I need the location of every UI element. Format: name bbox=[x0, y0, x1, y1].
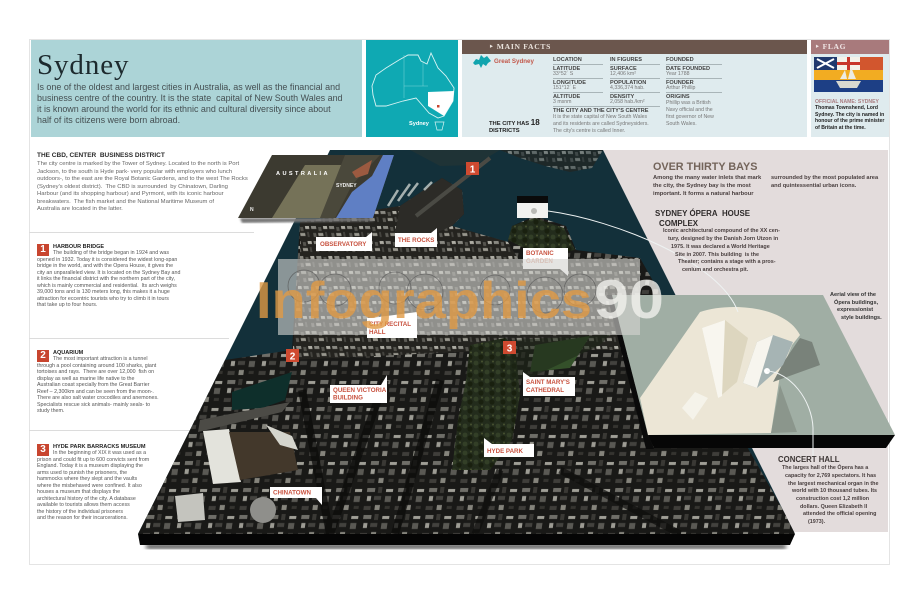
flag caption: Sydney. The city is named in bbox=[815, 112, 884, 118]
body text: opened in 1932. Today it is considered the widest long-span bbox=[37, 256, 177, 262]
body text: hammocks where they slept and the vaults bbox=[37, 476, 137, 482]
body text: the history of the individual prisoners bbox=[37, 508, 123, 514]
text: city and centre: and its residents are called Sydneysiders. bbox=[553, 121, 649, 127]
text: CBD paragraph bbox=[37, 161, 248, 212]
icon: Great Sydney map bbox=[473, 55, 491, 68]
text: opera complex paragraph: tury, designed by the Danish Jorn Utzon in bbox=[668, 236, 778, 242]
body text: display as well as marine life native to the bbox=[37, 376, 134, 382]
opera house aerial panel bbox=[607, 295, 895, 449]
text: aerial view note: Aerial view of the bbox=[830, 292, 876, 298]
text: aerial view note bbox=[830, 292, 882, 321]
body text: houses a museum that displays the bbox=[37, 489, 120, 495]
panel: locator map bbox=[366, 40, 458, 137]
body text: available to tourists allows them access bbox=[37, 502, 130, 508]
body text: architectural history of the city. A database bbox=[37, 496, 136, 502]
label: Queen Victoria Building: QUEEN VICTORIA bbox=[333, 387, 387, 394]
label: Hyde Park bbox=[484, 438, 534, 457]
flag caption: of Britain at the time. bbox=[815, 125, 866, 131]
label: Observatory: OBSERVATORY bbox=[320, 241, 367, 248]
text: concert hall paragraph: the largest mechanical organ in the bbox=[788, 481, 878, 487]
city land bbox=[130, 178, 800, 540]
body text: which is mainly commercial and residential. Its arch weighs bbox=[37, 282, 177, 288]
panel: hyde park barracks bbox=[37, 444, 149, 521]
number badge 1: 1 bbox=[40, 244, 46, 255]
label: Botanic Garden: GARDEN bbox=[526, 258, 553, 265]
body text: through a pool containing around 100 sharks, giant bbox=[37, 362, 156, 368]
label: Botanic Garden bbox=[523, 248, 568, 276]
text: CBD paragraph: breakwaters. The fish market and the National Maritime Museum of bbox=[37, 198, 214, 204]
text: over thirty bays column 1: Among the many water inlets that mark bbox=[653, 175, 761, 181]
number marker 1: 1 bbox=[470, 164, 476, 176]
label: Queen Victoria Building: BUILDING bbox=[333, 394, 363, 402]
text: over thirty bays column 1 bbox=[653, 175, 762, 197]
flag header: ‣ FLAG bbox=[815, 42, 846, 51]
body text: There are also salt water crocodiles and anemones. bbox=[37, 395, 159, 401]
number marker 2 bbox=[286, 349, 299, 362]
intro text: business centre of the country. It is the state capital of New South Wales and bbox=[37, 93, 343, 103]
facts column: founded: FOUNDER bbox=[666, 80, 694, 86]
inset: Australia satellite map bbox=[236, 154, 396, 223]
facts column: in figures: DENSITY bbox=[610, 94, 634, 100]
text: CBD paragraph: Harbour (and its shopping harbour) and Pyrmont, with its iconic harbour bbox=[37, 191, 224, 197]
facts column: in figures: SURFACE bbox=[610, 66, 637, 72]
body text: study them. bbox=[37, 408, 64, 414]
facts column: founded: DATE FOUNDED bbox=[666, 66, 710, 72]
title: Sydney bbox=[37, 49, 129, 81]
panel: harbour bridge bbox=[37, 244, 180, 308]
number marker 1 bbox=[466, 162, 479, 176]
text: city and centre: It is the state capital of New South Wales bbox=[553, 114, 647, 120]
text: CBD paragraph: The city centre is marked by the Tower of Sydney. Located to the north is Port bbox=[37, 161, 239, 167]
text: concert hall paragraph bbox=[782, 464, 878, 525]
text: concert hall paragraph: world with 10 thousand tubes. Its bbox=[792, 488, 877, 494]
label: The Rocks bbox=[395, 228, 437, 247]
text: over thirty bays column 2 bbox=[771, 175, 878, 189]
label: Saint Mary's Cathedral: SAINT MARY'S bbox=[526, 379, 570, 386]
panel: title header bbox=[31, 40, 362, 137]
facts column: in figures: IN FIGURES bbox=[610, 57, 642, 63]
body text: that take up to four hours. bbox=[37, 302, 97, 308]
heading: HARBOUR BRIDGE bbox=[53, 244, 104, 250]
text: over thirty bays heading: OVER THIRTY BAYS bbox=[653, 161, 757, 173]
inset north arrow: N bbox=[250, 207, 254, 213]
facts column: founded: South Wales. bbox=[666, 121, 697, 127]
label: The Rocks: THE ROCKS bbox=[398, 237, 434, 244]
text: concert hall paragraph: construction cost 1,2 million bbox=[796, 496, 869, 502]
text: concert hall heading: CONCERT HALL bbox=[778, 455, 840, 464]
main facts header: ‣ MAIN FACTS bbox=[489, 42, 551, 51]
leader line: Concert Hall bbox=[764, 368, 813, 456]
body text: Reef – 2,300km and can be seen from the moon-. bbox=[37, 388, 154, 394]
intro text: it is known around the world for its ethnic and cultural diversity since about bbox=[37, 104, 331, 114]
flag caption: OFFICIAL NAME: SYDNEY bbox=[815, 99, 879, 105]
body text: Australian coast specially from the Great Barrier bbox=[37, 382, 149, 388]
facts column: in figures: POPULATION bbox=[610, 80, 646, 86]
number badge 2 bbox=[37, 350, 49, 362]
body text: city an unparalleled view. It is located on the Sydney Bay and bbox=[37, 270, 180, 276]
number marker 3: 3 bbox=[507, 344, 513, 354]
dark avenues bbox=[302, 380, 440, 534]
intro text bbox=[37, 82, 343, 125]
flag caption: honour of the prime minister bbox=[815, 118, 884, 124]
text: concert hall paragraph: (1973). bbox=[808, 519, 825, 525]
callout: districts bbox=[489, 118, 540, 134]
facts column: founded: ORIGINS bbox=[666, 94, 690, 100]
facts column: founded: Arthur Phillip bbox=[666, 85, 695, 91]
text: CBD paragraph: Australia are located in the latter. bbox=[37, 206, 123, 212]
label: Chinatown: CHINATOWN bbox=[273, 490, 311, 496]
body text: bridge in the world, and with the Opera House, it gives the bbox=[37, 263, 173, 269]
text: concert hall paragraph: attended the official opening bbox=[803, 511, 876, 517]
darling harbour bbox=[232, 372, 292, 410]
label: Hyde Park: HYDE PARK bbox=[487, 448, 524, 455]
body text: Specialists rescue sick animals- mainly seals- to bbox=[37, 402, 150, 408]
text: CBD heading: THE CBD, CENTER BUSINESS DISTRICT bbox=[37, 152, 165, 159]
facts column: location: LONGITUDE bbox=[553, 80, 586, 86]
facts column: in figures bbox=[610, 57, 660, 105]
facts column: in figures: 4,336,374 hab. bbox=[610, 85, 645, 91]
facts column: location: 151°12´ E bbox=[553, 85, 576, 91]
text: aerial view note: expressionist bbox=[837, 307, 873, 313]
label: Saint Mary's Cathedral bbox=[523, 372, 575, 396]
intro text: half of its citizens were born abroad. bbox=[37, 115, 180, 125]
panel: right pink background bbox=[600, 150, 888, 532]
text: over thirty bays column 1: the city, the Sydney bay is the most bbox=[653, 183, 751, 189]
facts column: location: LATITUDE bbox=[553, 66, 580, 72]
text: over thirty bays column 2: surrounded by the most populated area bbox=[771, 175, 878, 181]
facts column: location: 33°52´ S bbox=[553, 71, 573, 77]
label: Great Sydney: Great Sydney bbox=[494, 58, 534, 65]
flag caption bbox=[815, 99, 884, 131]
inset label: Australia: AUSTRALIA bbox=[276, 171, 330, 177]
text: city and centre bbox=[553, 106, 660, 134]
body text: The most important attraction is a tunnel bbox=[53, 356, 148, 362]
text: opera complex heading: COMPLEX bbox=[659, 218, 698, 228]
facts column: founded bbox=[666, 57, 722, 127]
text: opera complex paragraph: Iconic architectural compound of the XX cen- bbox=[663, 228, 780, 234]
facts column: founded: first governor of New bbox=[666, 114, 714, 120]
label: City Recital Hall bbox=[367, 312, 417, 338]
icon: Sydney flag bbox=[814, 57, 883, 92]
opera podium bbox=[640, 307, 800, 435]
body text: and the reason for their incarcerations. bbox=[37, 515, 128, 521]
text: opera complex paragraph bbox=[663, 228, 780, 273]
text: opera complex paragraph: Theater; contains a stage with a pros- bbox=[678, 259, 776, 265]
body text: England. Today it is a museum displaying the bbox=[37, 463, 143, 469]
text: opera complex heading bbox=[655, 208, 750, 228]
flag header bbox=[811, 40, 889, 54]
number marker 3 bbox=[503, 341, 516, 354]
text: opera complex paragraph: Site in 2007. This building is the bbox=[675, 252, 759, 258]
graphic layer bbox=[138, 150, 895, 550]
leader line: Opera bbox=[548, 211, 738, 312]
watermark bbox=[256, 259, 664, 338]
facts column: location: ALTITUDE bbox=[553, 94, 580, 100]
facts column: location: 3 msnm bbox=[553, 99, 571, 105]
watermark: Infographics bbox=[256, 272, 592, 330]
intro text: Is one of the oldest and largest cities in Australia, as well as the financial and bbox=[37, 82, 340, 92]
body text: prison and could fit up to 600 convicts sent from bbox=[37, 456, 149, 462]
body text bbox=[37, 356, 159, 414]
facts column: in figures: 2,058 hab./km² bbox=[610, 99, 645, 105]
text: CBD paragraph: (Sydney's oldest district). The CBD is surrounded by Chinatown, Darling bbox=[37, 184, 228, 190]
text: opera complex paragraph: cenium and orchestra pit. bbox=[682, 267, 748, 273]
number badge 2: 2 bbox=[40, 350, 46, 361]
body text: 39,000 tons and is 130 meters long, this makes it a huge bbox=[37, 289, 170, 295]
flag caption: Thomas Townshend, Lord bbox=[815, 105, 878, 111]
botanic garden bbox=[508, 218, 575, 250]
facts column: founded: Year 1788 bbox=[666, 71, 689, 77]
text: over thirty bays column 2: and quintessential urban icons. bbox=[771, 183, 856, 189]
text: aerial view note: Ópera buildings, bbox=[834, 300, 878, 306]
label: Queen Victoria Building bbox=[330, 375, 387, 403]
text: city and centre: The city's centre is called Inner. bbox=[553, 128, 625, 134]
text: over thirty bays column 1: important. It forms a natural harbour bbox=[653, 191, 754, 197]
number badge 1 bbox=[37, 244, 49, 256]
text: aerial view note: style buildings. bbox=[841, 315, 882, 321]
heading: HYDE PARK BARRACKS MUSEUM bbox=[53, 444, 146, 450]
panel: main facts bbox=[462, 40, 807, 137]
facts column: founded: FOUNDED bbox=[666, 57, 694, 63]
main aerial map bbox=[130, 150, 810, 549]
main facts header bbox=[462, 40, 807, 54]
text: opera complex paragraph: 1975. It was declared a World Heritage bbox=[671, 244, 770, 250]
north shore bbox=[500, 150, 603, 172]
body text bbox=[37, 450, 149, 521]
icon: Australia outline bbox=[372, 53, 454, 130]
facts column: founded: Navy official and the bbox=[666, 107, 713, 113]
text: city and centre: THE CITY AND THE CITY'S CENTRE bbox=[553, 108, 648, 114]
bridge bbox=[416, 158, 490, 216]
text: opera complex heading: SYDNEY ÓPERA HOUSE bbox=[655, 209, 750, 218]
hyde park bbox=[452, 338, 520, 470]
heading: AQUARIUM bbox=[53, 350, 83, 356]
text: CBD paragraph: Jackson, to the south is Hyde park- very popular with employers who lunch bbox=[37, 168, 232, 174]
facts column: location: LOCATION bbox=[553, 57, 582, 63]
body text: In the beginning of XIX it was used as a bbox=[53, 450, 146, 456]
panel: aquarium bbox=[37, 350, 159, 414]
number marker 2: 2 bbox=[290, 352, 296, 362]
piers bbox=[388, 182, 432, 206]
callout: districts: DISTRICTS bbox=[489, 128, 520, 134]
label: Sydney: Sydney bbox=[409, 121, 430, 127]
label: Saint Mary's Cathedral: CATHEDRAL bbox=[526, 387, 564, 394]
body text: where the misbehaved were confined. It also bbox=[37, 482, 142, 488]
opera house marker on map bbox=[517, 196, 548, 218]
facts column: in figures: 12,406 km² bbox=[610, 71, 636, 77]
label: Botanic Garden: BOTANIC bbox=[526, 250, 554, 257]
callout: districts: THE CITY HAS 18 bbox=[489, 118, 540, 127]
body text bbox=[37, 250, 180, 308]
exhibition roofs bbox=[203, 429, 241, 484]
text: concert hall paragraph: capacity for 2,769 spectators. It has bbox=[785, 473, 876, 479]
label: Observatory bbox=[316, 232, 372, 251]
number badge 3 bbox=[37, 444, 49, 456]
text: concert hall paragraph: dollars. Queen Elizabeth II bbox=[800, 504, 867, 510]
body text: attraction for eccentric tourists who try to climb it in tours bbox=[37, 296, 169, 302]
body text: arms used to punish the prisoners, the bbox=[37, 470, 127, 476]
label: City Recital Hall: CITY RECITAL bbox=[369, 321, 411, 328]
label: City Recital Hall: HALL bbox=[369, 329, 386, 336]
panel: flag bbox=[811, 40, 889, 137]
number badge 3: 3 bbox=[40, 444, 46, 455]
inset label: Sydney: SYDNEY bbox=[336, 183, 357, 189]
watermark: 90 bbox=[594, 268, 664, 330]
body text: tortoises and rays. There are over 12,000 fish on bbox=[37, 369, 154, 375]
facts column: founded: Phillip was a British bbox=[666, 100, 711, 106]
opera shadow bbox=[773, 338, 820, 382]
body text: The building of the bridge began in 1924 and was bbox=[53, 250, 169, 256]
text: concert hall paragraph: The larges hall of the Ópera has a bbox=[782, 465, 868, 471]
text: CBD paragraph: outdoors-, to the east are the Royal Botanic Gardens, and to the west The Rocks bbox=[37, 176, 248, 182]
label: Chinatown bbox=[270, 487, 322, 505]
body text: it links the financial district with the northern part of the city, bbox=[37, 276, 175, 282]
facts column: location bbox=[553, 57, 603, 105]
opera sails bbox=[702, 320, 748, 398]
